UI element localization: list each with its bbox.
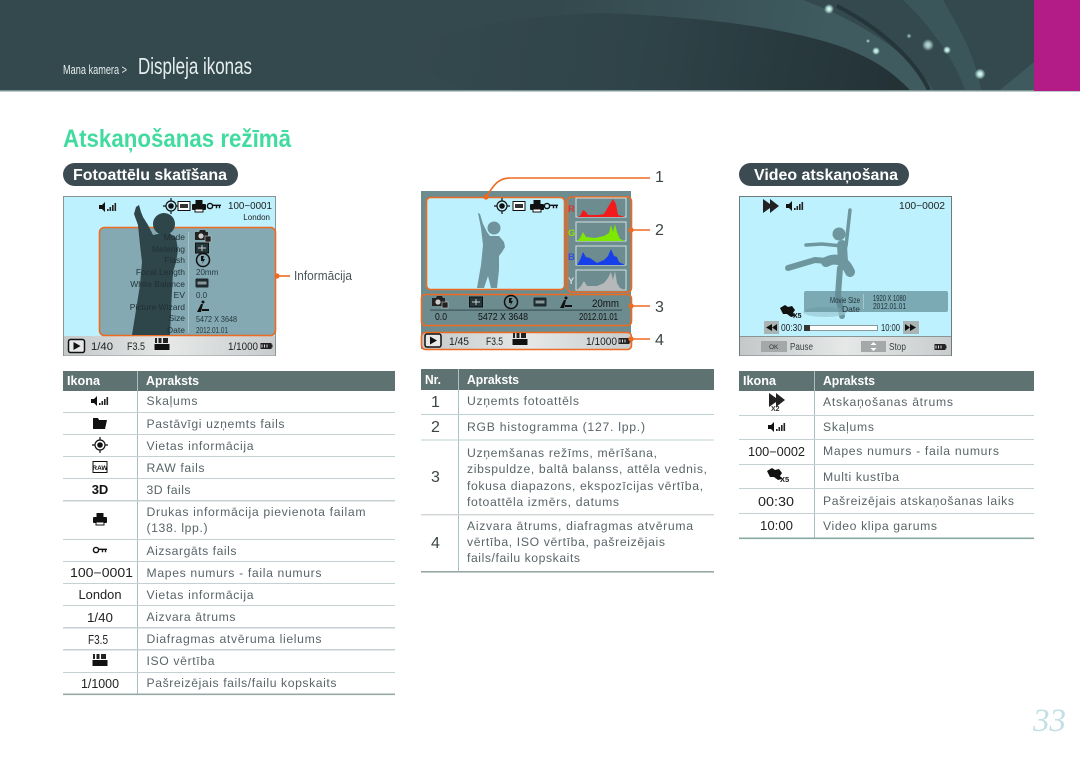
table icons xyxy=(70,396,133,691)
table: callout numbers: 2 xyxy=(431,419,440,436)
table: callout numbers: fails/failu kopskaits xyxy=(467,551,580,565)
table: callout numbers: Aizvara ātrums, diafragmas atvēruma xyxy=(467,519,693,533)
panel: video playback screen xyxy=(740,196,952,356)
panel: photo viewing screen: 1/40 xyxy=(91,341,113,353)
panel: photo viewing screen: 1/1000 xyxy=(228,341,258,353)
table icons: 3D xyxy=(92,482,108,497)
panel: histogram screen xyxy=(421,191,632,350)
shutter bar xyxy=(422,332,632,350)
table icons: 1/1000 xyxy=(81,677,119,691)
table icons: 1/40 xyxy=(87,611,113,625)
table: callout numbers: vērtība, ISO vērtība, pašreizējais xyxy=(467,535,665,549)
shooting info: 0.0 xyxy=(435,311,447,323)
panel: information overlay xyxy=(100,205,276,336)
table: video icons: 100−0002 xyxy=(748,445,805,459)
shooting info: 20mm xyxy=(592,298,619,310)
table: callout numbers: fotoattēla izmērs, datums xyxy=(467,495,619,509)
table text: Vietas informācija xyxy=(146,588,254,602)
info strip: Movie Size xyxy=(830,295,860,305)
panel: information overlay: Size xyxy=(168,313,185,323)
table: callout numbers: Uzņemts fotoattēls xyxy=(467,394,579,408)
table: video icons: X5 xyxy=(780,475,789,484)
table icons: F3.5 xyxy=(88,633,108,647)
photo area xyxy=(426,198,564,290)
table text: Skaļums xyxy=(146,394,198,408)
table text: ISO vērtība xyxy=(146,654,215,668)
page number: 33 xyxy=(1032,703,1066,739)
panel: information overlay: Flash xyxy=(164,255,185,265)
panel: photo viewing screen xyxy=(64,196,276,356)
heading: photo viewing xyxy=(63,163,238,186)
panel: information overlay: EV xyxy=(174,290,185,300)
table text: Drukas informācija pievienota failam xyxy=(146,505,366,519)
histograms: G xyxy=(568,228,575,239)
panel: information overlay: 2012.01.01 xyxy=(196,326,228,335)
histograms: Y xyxy=(568,276,575,287)
table text: RAW fails xyxy=(146,461,204,475)
table: video icons: X2 xyxy=(771,406,780,413)
table text xyxy=(146,394,366,690)
panel: video playback screen: 00:30 xyxy=(781,323,802,334)
panel: video playback screen: 100−0002 xyxy=(899,201,945,212)
table: callout numbers: 1 xyxy=(431,394,440,411)
panel: video playback screen: Pause xyxy=(790,342,813,353)
table text: 3D fails xyxy=(146,483,190,497)
table: video icons: Skaļums xyxy=(823,420,874,434)
histograms: B xyxy=(568,252,575,263)
heading: video playback: Video atskaņošana xyxy=(754,167,898,184)
table: callout numbers: zibspuldze, baltā balanss, attēla vednis, xyxy=(467,462,707,476)
panel: information overlay: 5472 X 3648 xyxy=(196,315,237,324)
table: video icons xyxy=(739,371,1034,539)
table: video icons: Multi kustība xyxy=(823,470,899,484)
table text: Diafragmas atvēruma lielums xyxy=(146,632,322,646)
table: photo icons: Apraksts xyxy=(146,374,199,388)
table: callout numbers: Apraksts xyxy=(467,373,519,387)
callouts 1-4: 2 xyxy=(655,222,664,239)
callouts 1-4 xyxy=(483,169,664,349)
panel: information overlay: White Balance xyxy=(130,279,185,289)
shooting info xyxy=(422,294,632,326)
callouts 1-4: 4 xyxy=(655,332,664,349)
table text: Pastāvīgi uzņemts fails xyxy=(146,417,284,431)
panel: photo viewing screen: 100−0001 xyxy=(228,201,272,212)
panel: photo viewing screen: London xyxy=(243,213,270,222)
panel: information overlay: Picture Wizard xyxy=(130,302,185,312)
title: Atskaņošanas režīmā xyxy=(63,125,292,153)
info strip: 2012.01.01 xyxy=(873,302,906,311)
breadcrumb xyxy=(63,53,252,79)
table text: Mapes numurs - faila numurs xyxy=(146,566,322,580)
table: callout numbers xyxy=(421,369,714,573)
histograms xyxy=(568,197,632,292)
panel: information overlay: 20mm xyxy=(196,268,219,277)
table text: Aizsargāts fails xyxy=(146,544,236,558)
info strip: 1920 X 1080 xyxy=(873,294,906,303)
shutter bar: F3.5 xyxy=(486,336,503,348)
shutter bar: 1/45 xyxy=(449,336,469,348)
table: photo icons: Ikona xyxy=(67,374,101,388)
table text: Aizvara ātrums xyxy=(146,610,236,624)
ballerina silhouette xyxy=(788,210,850,317)
table: video icons: Ikona xyxy=(743,374,777,388)
table icons: London xyxy=(78,588,122,602)
breadcrumb: Displeja ikonas xyxy=(138,53,252,79)
table text: Pašreizējais fails/failu kopskaits xyxy=(146,676,336,690)
shooting info: 2012.01.01 xyxy=(579,311,618,323)
histograms: R xyxy=(568,204,575,215)
table text: Vietas informācija xyxy=(146,439,254,453)
callout: information: Informācija xyxy=(294,269,352,283)
breadcrumb: Mana kamera > xyxy=(63,62,127,77)
table: video icons: Atskaņošanas ātrums xyxy=(823,395,953,409)
panel: photo viewing screen: F3.5 xyxy=(127,341,145,353)
table: callout numbers: 4 xyxy=(431,535,440,552)
table: callout numbers: RGB histogramma (127. lpp.) xyxy=(467,420,645,434)
table: callout numbers: Uzņemšanas režīms, mērīšana, xyxy=(467,446,657,460)
table text: (138. lpp.) xyxy=(146,521,208,535)
table icons: RAW xyxy=(92,465,108,472)
table: video icons: Pašreizējais atskaņošanas laiks xyxy=(823,494,1014,508)
table: video icons: Mapes numurs - faila numurs xyxy=(823,444,999,458)
panel: information overlay: 0.0 xyxy=(196,291,208,300)
table: video icons: Apraksts xyxy=(823,374,875,388)
table: callout numbers: 3 xyxy=(431,469,440,486)
table: photo icons xyxy=(63,371,395,695)
header banner xyxy=(0,0,1080,92)
table: video icons: 00:30 xyxy=(758,495,794,509)
callouts 1-4: 3 xyxy=(655,299,664,316)
callouts 1-4: 1 xyxy=(655,169,664,186)
panel: information overlay: Mode xyxy=(164,232,185,242)
panel: video playback screen: OK xyxy=(769,344,779,351)
table: video icons: 10:00 xyxy=(760,519,793,533)
panel: information overlay: Date xyxy=(167,325,185,335)
panel: video playback screen: Stop xyxy=(889,342,906,353)
table: callout numbers: fokusa diapazons, ekspozīcijas vērtība, xyxy=(467,479,703,493)
panel: video playback screen: X5 xyxy=(793,313,802,320)
panel: video playback screen: 10:00 xyxy=(881,323,900,334)
table: video icons: Video klipa garums xyxy=(823,519,937,533)
table: callout numbers: Nr. xyxy=(425,373,441,387)
panel: information overlay: Metering xyxy=(152,244,185,254)
shutter bar: 1/1000 xyxy=(586,336,617,348)
heading: video playback xyxy=(739,163,909,186)
heading: photo viewing: Fotoattēlu skatīšana xyxy=(73,167,227,184)
panel: information overlay: Focal Length xyxy=(136,267,185,277)
shooting info: 5472 X 3648 xyxy=(478,311,528,323)
info strip: Date xyxy=(842,304,860,314)
info strip xyxy=(804,291,948,314)
table icons: 100−0001 xyxy=(70,566,133,580)
